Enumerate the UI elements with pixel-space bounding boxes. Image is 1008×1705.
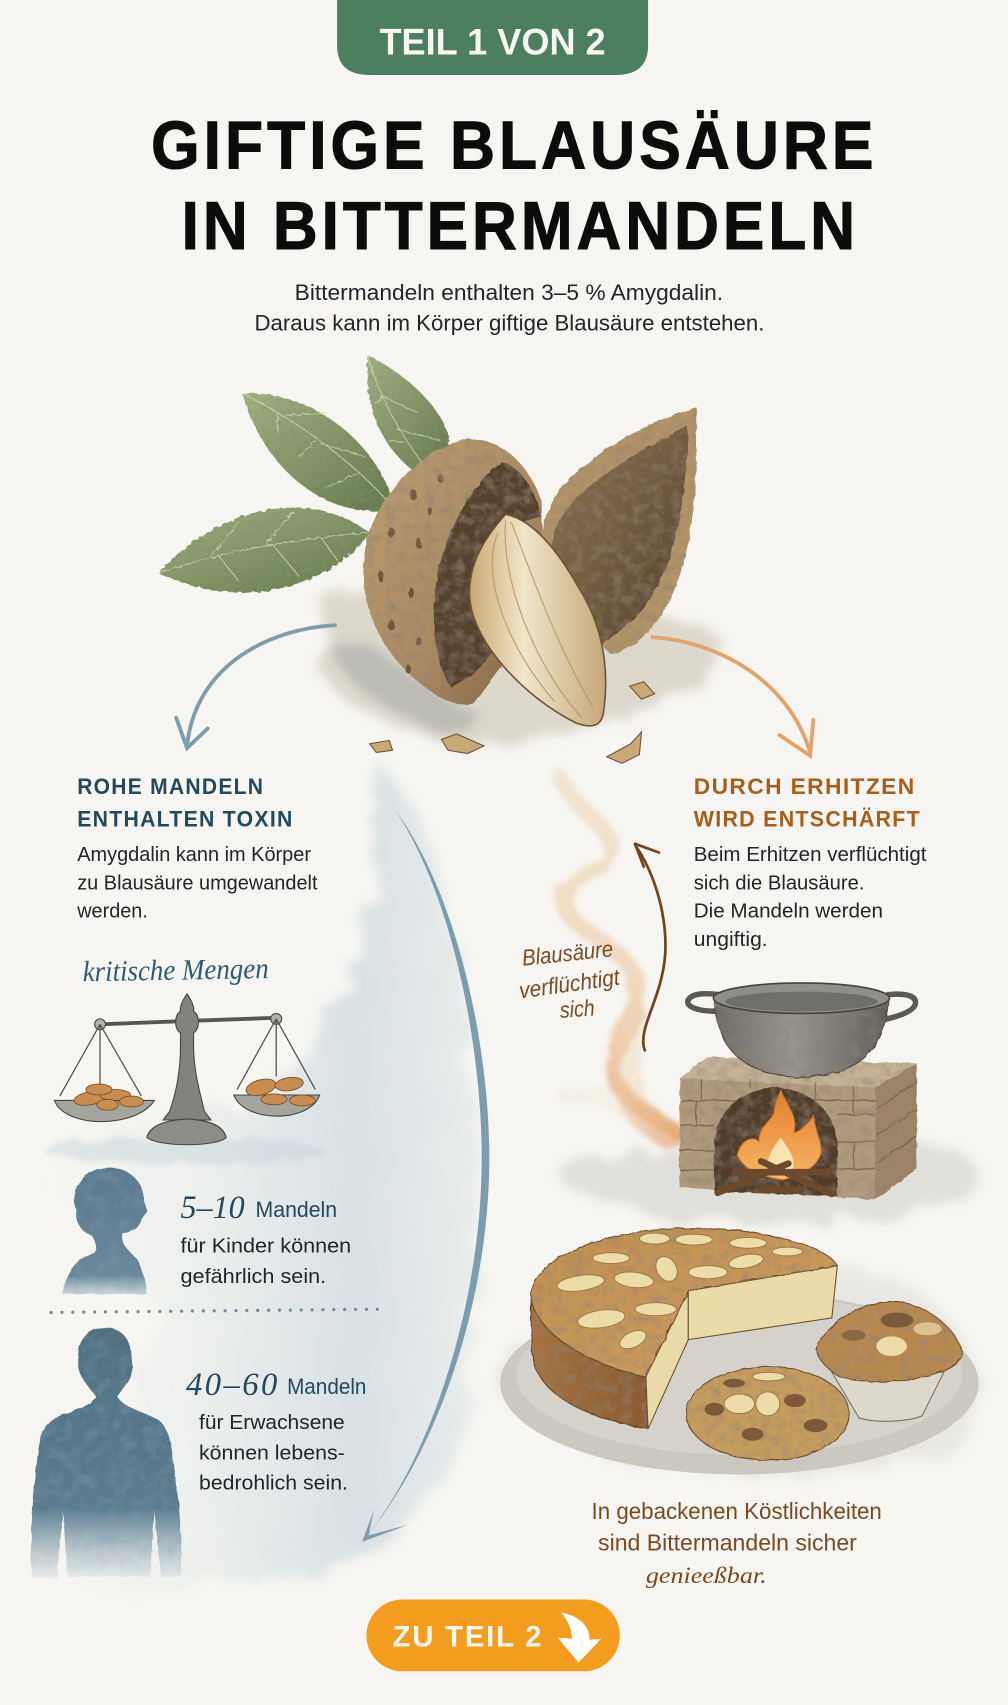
illustration: muffin [816,1301,962,1421]
panel: heating heading [694,774,921,831]
illustration: left almond shell [363,439,544,704]
title [151,109,878,264]
title: GIFTIGE BLAUSÄURE [151,109,878,184]
subtitle: Daraus kann im Körper giftige Blausäure entstehen. [254,311,764,336]
ground wash under almonds [321,587,723,745]
text block: raw almonds: werden. [76,901,148,923]
ground wash under stove [500,1133,982,1475]
panel: raw almonds heading: ENTHALTEN TOXIN [77,806,294,831]
icon: curved down arrow [558,1613,601,1663]
handwritten note: acid evaporates: verflüchtigt [517,963,623,1004]
illustration: almond cake [531,1229,837,1429]
title: IN BITTERMANDELN [182,189,859,264]
handwritten note: acid evaporates: Blausäure [521,935,614,971]
illustration: brick stove [680,1057,917,1199]
text block: adult amounts: bedrohlich sein. [199,1473,348,1495]
caption: baked goods: In gebackenen Köstlichkeiten [592,1498,882,1524]
icon: child silhouette [62,1168,148,1294]
button: to part 2 [366,1600,620,1671]
illustration: right almond shell [542,408,697,655]
text block: raw almonds: zu Blausäure umgewandelt [77,872,318,894]
illustration: fire [718,1091,832,1194]
text block: children amounts: für Kinder können [181,1236,351,1258]
panel: raw almonds heading [77,774,294,831]
button: to part 2: ZU TEIL 2 [393,1620,542,1653]
text block: adult amounts: können lebens- [199,1442,345,1464]
text block: heating: Beim Erhitzen verflüchtigt [694,844,927,866]
header tab [337,0,648,75]
text block: children amounts [181,1190,351,1288]
handwritten note: acid evaporates: sich [559,994,595,1023]
text block: children amounts: 5–10 [181,1190,245,1226]
handwritten label: critical amounts: kritische Mengen [82,953,269,988]
illustration: almond leaves [159,356,449,593]
text block: children amounts: Mandeln [256,1197,337,1222]
arrow: to heating [652,637,813,756]
caption: baked goods: genieeßbar. [646,1563,767,1588]
illustration: almond kernel [470,514,606,726]
text block: children amounts: gefährlich sein. [181,1266,326,1288]
icon: adult silhouette [31,1328,181,1579]
panel: raw almonds heading: ROHE MANDELN [77,774,264,799]
panel: heating heading: WIRD ENTSCHÄRFT [694,806,921,831]
caption: baked goods [592,1498,882,1588]
text block: adult amounts [186,1367,366,1495]
header tab: TEIL 1 VON 2 [379,21,606,62]
handwritten note: acid evaporates [517,935,623,1023]
text block: heating: ungiftig. [694,929,768,951]
steam [560,777,685,1142]
caption: baked goods: sind Bittermandeln sicher [598,1530,857,1556]
arrow: rising steam [635,844,665,1050]
text block: raw almonds [76,844,318,923]
subtitle [254,280,764,336]
illustration: cookie [686,1367,849,1460]
text block: adult amounts: für Erwachsene [199,1412,345,1434]
illustration: cooking pot [688,983,916,1078]
text block: adult amounts: Mandeln [287,1374,366,1399]
text block: heating: Die Mandeln werden [694,901,883,923]
blue watercolor wash [43,761,478,1590]
subtitle: Bittermandeln enthalten 3–5 % Amygdalin. [295,280,723,305]
text block: heating [694,844,927,951]
text block: raw almonds: Amygdalin kann im Körper [77,844,311,866]
text block: adult amounts: 40–60 [186,1367,277,1403]
panel: heating heading: DURCH ERHITZEN [694,774,916,799]
text block: heating: sich die Blausäure. [694,872,864,894]
illustration: plate [500,1292,979,1474]
arrow: to raw almonds [176,625,335,748]
illustration: shell chips [370,682,655,763]
arrow: long curved arrow [362,808,489,1542]
icon: balance scale with almonds [43,994,326,1163]
